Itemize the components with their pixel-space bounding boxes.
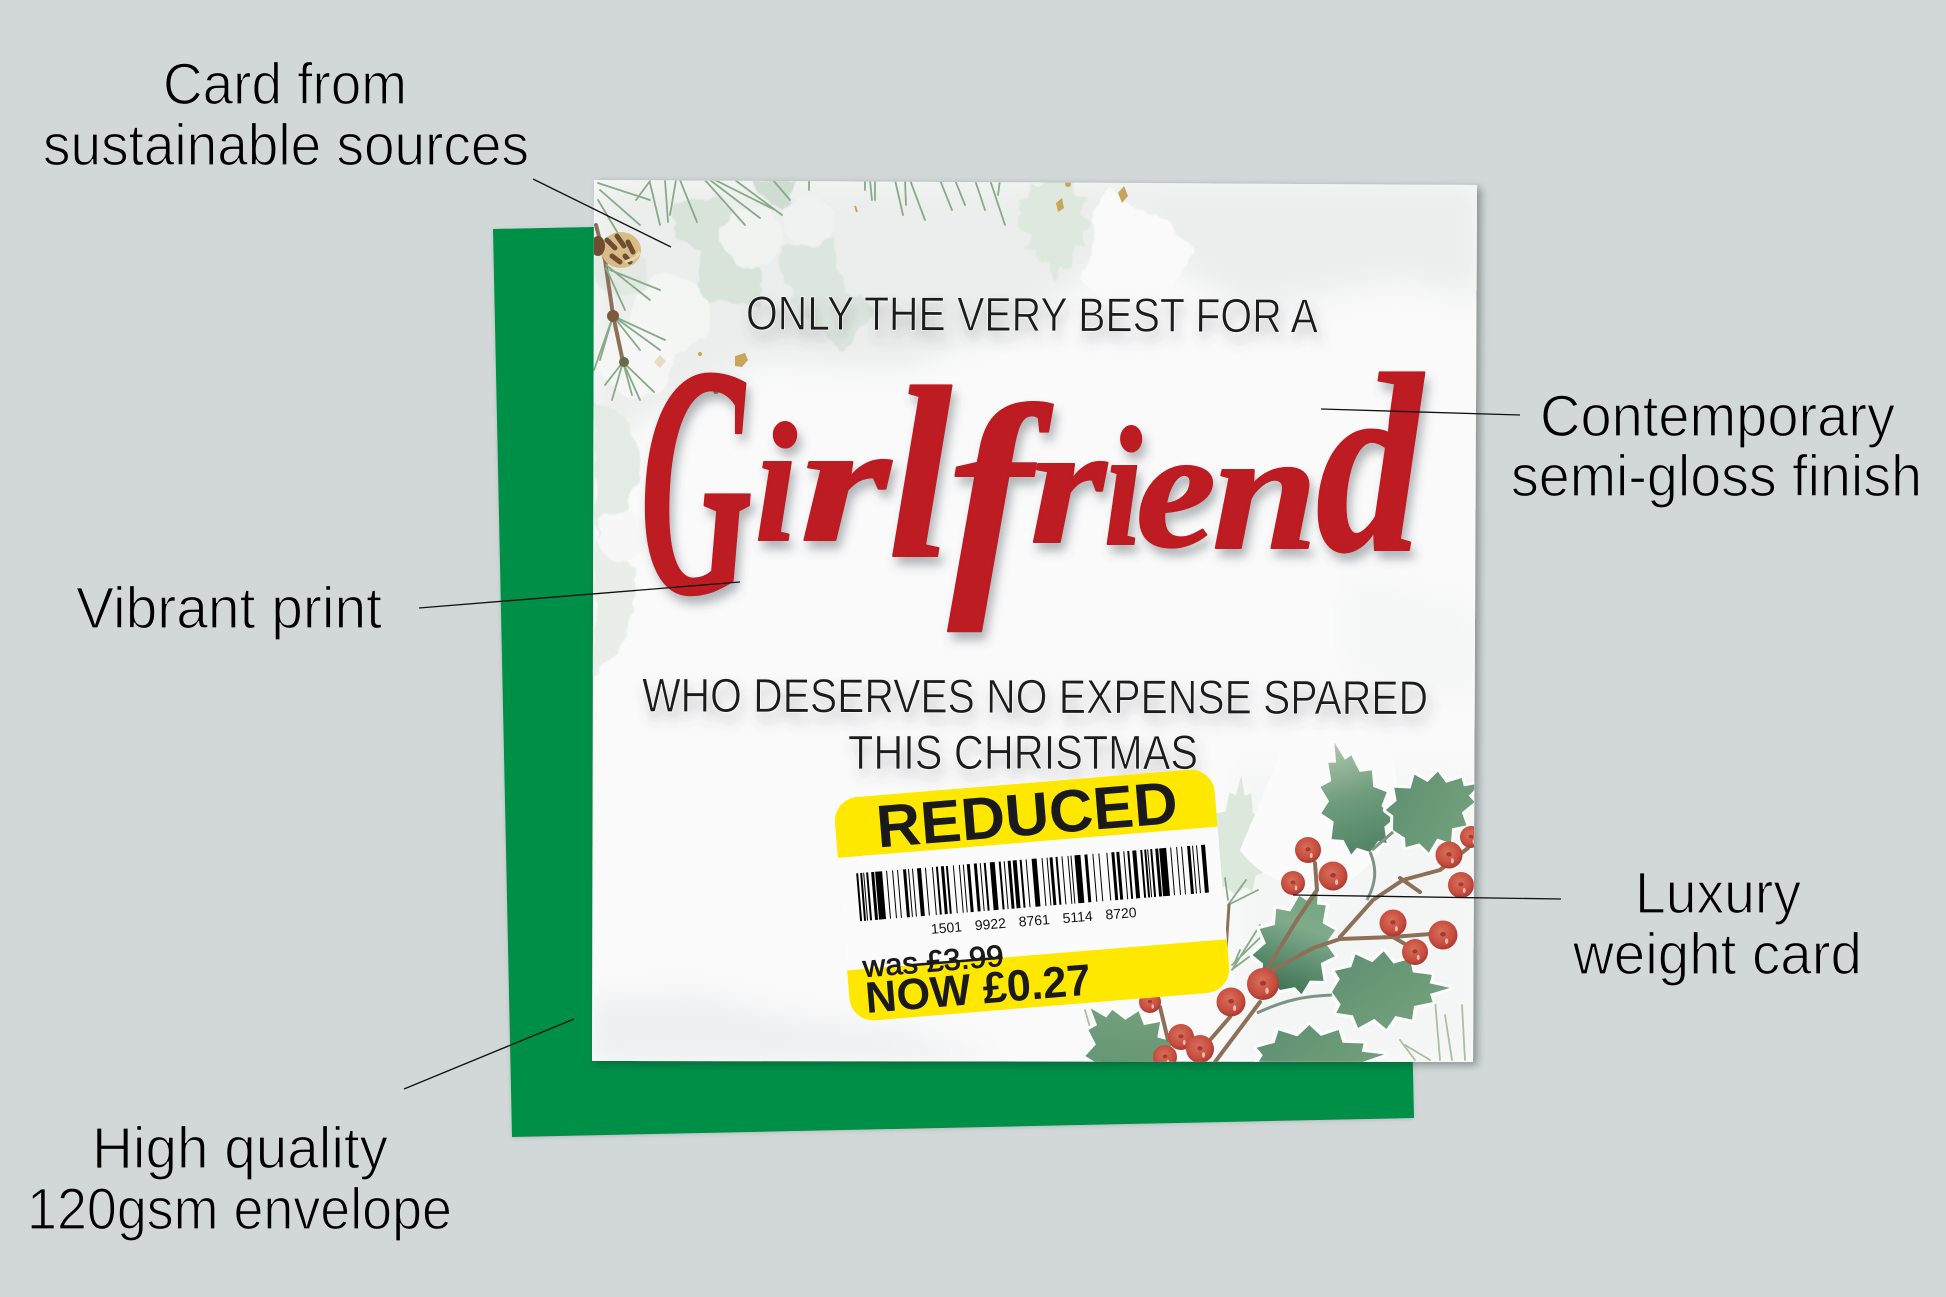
envelope [493,211,1414,1137]
text: was price: was £3.99 [861,940,1005,984]
leaf: bottom [1254,1025,1384,1062]
heading: Girlfriend: G [640,299,752,664]
heading: Girlfriend: r [800,389,892,577]
callout: contemporary semi-gloss finish: Contemporary [1540,384,1895,449]
callout: luxury weight card [1293,861,1862,987]
heading line: only the very best: ONLY THE VERY BEST FOR A [746,288,1318,344]
icon: pine cone [591,232,641,268]
callout: contemporary semi-gloss finish: semi-gloss finish [1511,444,1922,509]
subheading: who deserves no expense spared [642,670,1428,780]
white halo area [1240,814,1270,872]
small pine sprig [1085,878,1465,1062]
holly branches [1160,832,1468,1062]
yellow band: top [831,766,1221,858]
heading: Girlfriend: r [1030,391,1108,579]
strikethrough [913,958,1003,965]
pale holly leaf behind label [1216,776,1263,894]
heading: Girlfriend: e [1136,395,1216,583]
callout: card from sustainable sources: sustainable sources [43,113,529,178]
pine needles: top [597,180,1006,232]
sticker base [833,768,1231,1022]
heading: Girlfriend: l [888,338,952,610]
barcode [858,869,1208,897]
leaf: centre left [1249,890,1335,994]
callout: high quality 120gsm envelope: 120gsm envelope [27,1177,452,1242]
callout: vibrant print [76,576,740,641]
callout: high quality 120gsm envelope [27,1019,574,1242]
gold flecks [698,181,1128,394]
heading: Girlfriend: i [1104,393,1142,581]
pine branch with needles [594,225,666,400]
subheading: who deserves no expense spared: WHO DESERVES NO EXPENSE SPARED [642,670,1428,725]
callout: card from sustainable sources [43,52,671,247]
callout: luxury weight card: Luxury [1635,861,1801,926]
holly leaves [1057,732,1500,1114]
yellow band: bottom [845,939,1234,1024]
heading: Girlfriend: i [755,389,797,577]
text: now price: NOW £0.27 [863,956,1093,1023]
leaf: top [1320,742,1390,854]
pale watercolour wash [590,180,1480,1062]
callout: contemporary semi-gloss finish [1321,384,1922,509]
barcode digits: 1501 9922 8761 5114 8720 [930,904,1137,937]
callout: card from sustainable sources: Card from [163,52,407,117]
leaf: top right [1382,772,1474,852]
callout: vibrant print: Vibrant print [76,576,382,641]
heading: Girlfriend: n [1212,397,1318,585]
top left pale holly foliage [594,177,1194,680]
card artwork [590,177,1500,1114]
heading: Girlfriend [640,299,1425,664]
text: reduced: REDUCED [874,769,1180,860]
callout: luxury weight card: weight card [1572,922,1862,987]
callout: high quality 120gsm envelope: High quality [92,1116,388,1181]
reduced price sticker [831,766,1234,1024]
holly berries [1139,826,1482,1069]
heading: Girlfriend: f [948,356,1053,633]
card base [592,180,1477,1062]
heading: Girlfriend: d [1316,323,1425,606]
card [590,177,1500,1114]
subheading: who deserves no expense spared: THIS CHRISTMAS [848,727,1198,780]
leaf: bottom left [1085,1008,1173,1062]
leaf: centre right [1331,949,1451,1031]
